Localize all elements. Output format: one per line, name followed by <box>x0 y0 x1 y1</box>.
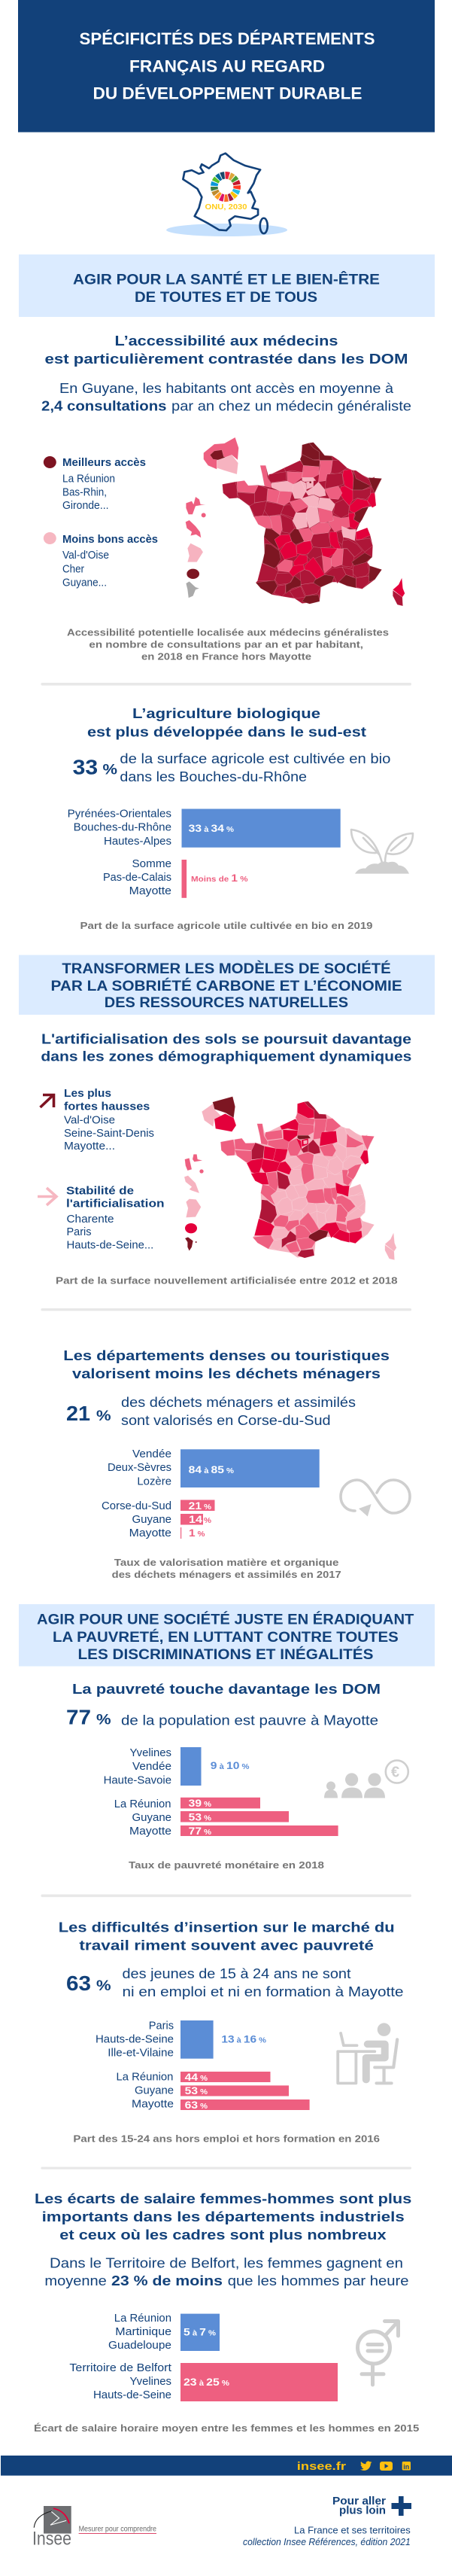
callout: pour aller plus loin <box>243 2495 411 2547</box>
map: accessibilité aux médecins par département <box>186 437 405 606</box>
section band: société juste: LA PAUVRETÉ, EN LUTTANT CONTRE TOUTES <box>53 1629 399 1646</box>
callout: pour aller plus loin: Pour aller <box>332 2495 386 2507</box>
caption: Accessibilité potentielle localisée aux médecins généralistes <box>67 628 389 638</box>
key figure: dans les Bouches-du-Rhône <box>120 769 307 784</box>
bar chart: Guyane <box>132 1514 171 1526</box>
bar chart: 39 % <box>189 1797 211 1809</box>
panel: accessibilité aux médecins <box>41 333 411 662</box>
key figure <box>66 1966 403 1999</box>
section band: modèles de société: TRANSFORMER LES MODÈLES DE SOCIÉTÉ <box>62 961 391 977</box>
callout: pour aller plus loin: La France et ses territoires <box>294 2525 411 2536</box>
caption: Part de la surface agricole utile cultivée en bio en 2019 <box>80 921 373 931</box>
key figure text <box>41 381 411 414</box>
logo: Insee: Insee <box>32 2528 71 2549</box>
caption: Part des 15-24 ans hors emploi et hors formation en 2016 <box>73 2133 380 2144</box>
legend: plus fortes hausses: Les plus <box>64 1088 111 1100</box>
bar chart: Pas-de-Calais <box>103 872 171 884</box>
bar chart: Yvelines <box>129 1747 171 1759</box>
icon: people and euro: € <box>391 1765 399 1781</box>
section band: modèles de société: DES RESSOURCES NATURELLES <box>105 995 348 1011</box>
caption: des déchets ménagers et assimilés en 2017 <box>112 1570 341 1580</box>
legend: moins bons accès: Val-d'Oise <box>62 550 109 562</box>
legend: stabilité de l'artificialisation: Charente <box>66 1213 114 1226</box>
bar chart: 44 % <box>185 2071 208 2083</box>
map: artificialisation par département <box>184 1097 396 1260</box>
heading: L'artificialisation des sols se poursuit davantage <box>41 1031 411 1046</box>
icon: gender equality <box>358 2322 399 2385</box>
heading: Les difficultés d’insertion sur le marché du <box>59 1920 395 1935</box>
key figure text: 2,4 consultations <box>41 399 167 414</box>
legend: stabilité de l'artificialisation: Stabilité de <box>66 1185 134 1197</box>
caption <box>112 1557 341 1580</box>
logo: Insee: Mesurer pour comprendre <box>79 2525 156 2534</box>
section band: modèles de société: PAR LA SOBRIÉTÉ CARBONE ET L’ÉCONOMIE <box>51 978 402 994</box>
bar chart <box>69 2313 338 2401</box>
icon: person at desk <box>338 2023 397 2083</box>
key figure: des jeunes de 15 à 24 ans ne sont <box>122 1966 350 1981</box>
heading: dans les zones démographiquement dynamiques <box>41 1049 411 1064</box>
caption: Part de la surface nouvellement artificialisée entre 2012 et 2018 <box>56 1275 398 1286</box>
panel: écarts de salaire <box>34 2191 419 2434</box>
heading: est particulièrement contrastée dans les DOM <box>45 352 408 367</box>
key figure: 63 <box>66 1972 91 1995</box>
icon: people and euro <box>324 1761 408 1798</box>
panel: agriculture biologique <box>68 706 413 931</box>
bar chart: Somme <box>132 858 171 870</box>
heading: La pauvreté touche davantage les DOM <box>72 1682 381 1697</box>
bar chart: Martinique <box>115 2326 171 2338</box>
bar chart: Bouches-du-Rhône <box>74 822 171 834</box>
bar chart: Vendée <box>132 1448 171 1460</box>
bar chart: 13 à 16 % <box>221 2033 266 2045</box>
heading: Les écarts de salaire femmes-hommes sont plus <box>35 2191 411 2206</box>
bar chart: Paris <box>149 2020 174 2032</box>
heading <box>41 1031 411 1064</box>
heading: est plus développée dans le sud-est <box>87 724 366 739</box>
section band: société juste: AGIR POUR UNE SOCIÉTÉ JUSTE EN ÉRADIQUANT <box>37 1611 414 1628</box>
key figure text: Dans le Territoire de Belfort, les femmes gagnent en <box>50 2255 403 2270</box>
bar chart: Haute-Savoie <box>104 1774 171 1786</box>
logo: Insee <box>32 2506 156 2549</box>
bar chart: 9 à 10 % <box>211 1759 250 1771</box>
bar chart: 23 à 25 % <box>184 2376 229 2388</box>
footer bar <box>1 2456 452 2476</box>
legend: meilleurs accès: Bas-Rhin, <box>62 486 107 498</box>
heading: L’accessibilité aux médecins <box>114 333 338 349</box>
key figure text: 23 % de moins <box>111 2273 223 2288</box>
key figure: 33 <box>73 756 98 778</box>
key figure: % <box>96 1713 111 1728</box>
heading: travail riment souvent avec pauvreté <box>79 1938 374 1953</box>
bar chart: 21 % <box>189 1500 211 1512</box>
heading: L’agriculture biologique <box>132 706 320 721</box>
section band: santé: DE TOUTES ET DE TOUS <box>135 290 317 306</box>
caption: Taux de valorisation matière et organique <box>114 1557 338 1568</box>
icon: France outline with SDG wheel: ONU, 2030 <box>205 202 247 212</box>
key figure: 77 <box>66 1706 91 1729</box>
icon: France outline with SDG wheel <box>166 154 287 236</box>
legend: moins bons accès <box>44 532 158 589</box>
bar chart: 77 % <box>189 1825 211 1837</box>
caption: Écart de salaire horaire moyen entre les femmes et les hommes en 2015 <box>34 2422 419 2434</box>
icon: plus <box>391 2496 411 2516</box>
caption: en nombre de consultations par an et par habitant, <box>89 640 363 650</box>
key figure text: que les hommes par heure <box>228 2273 409 2288</box>
caption: en 2018 en France hors Mayotte <box>141 652 311 662</box>
bar chart: 1 % <box>189 1527 205 1539</box>
bar chart <box>104 1747 338 1838</box>
bar chart: Territoire de Belfort <box>69 2362 171 2374</box>
legend: meilleurs accès <box>44 456 146 512</box>
bar chart: Mayotte <box>129 1825 171 1838</box>
legend: moins bons accès: Guyane... <box>62 577 107 589</box>
bar chart: 53 % <box>189 1810 211 1822</box>
callout: pour aller plus loin: plus loin <box>339 2504 386 2517</box>
panel: insertion sur le marché du travail <box>59 1920 404 2144</box>
legend: moins bons accès: Moins bons accès <box>62 534 158 546</box>
heading: importants dans les départements industriels <box>42 2209 405 2224</box>
panel: pauvreté <box>66 1682 408 1871</box>
legend: plus fortes hausses: Val-d'Oise <box>64 1115 115 1127</box>
icon: plant <box>351 830 413 874</box>
title: DU DÉVELOPPEMENT DURABLE <box>93 84 362 102</box>
bar chart: Lozère <box>137 1475 171 1487</box>
icon: linkedin <box>402 2462 411 2471</box>
title: SPÉCIFICITÉS DES DÉPARTEMENTS <box>80 29 375 48</box>
heading <box>87 706 366 739</box>
key figure <box>66 1395 356 1428</box>
legend: plus fortes hausses: fortes hausses <box>64 1101 150 1113</box>
icon: youtube <box>380 2462 393 2471</box>
section band: modèles de société <box>19 955 435 1015</box>
footer bar: insee.fr <box>297 2460 346 2473</box>
bar chart: 84 à 85 % <box>189 1463 234 1475</box>
legend: moins bons accès: Cher <box>62 564 84 576</box>
bar chart: 5 à 7 % <box>184 2326 216 2338</box>
panel: artificialisation des sols <box>38 1031 411 1286</box>
bar chart <box>102 1448 320 1539</box>
heading <box>45 333 408 367</box>
legend: stabilité de l'artificialisation: l'artificialisation <box>66 1198 164 1210</box>
bar chart: Moins de 1 % <box>191 872 248 884</box>
key figure text: moyenne <box>44 2273 107 2288</box>
legend: stabilité de l'artificialisation: Hauts-de-Seine... <box>66 1239 153 1251</box>
legend: plus fortes hausses: Mayotte... <box>64 1140 115 1153</box>
bar chart: Yvelines <box>129 2376 171 2388</box>
heading: et ceux où les cadres sont plus nombreux <box>59 2227 387 2243</box>
caption: Taux de pauvreté monétaire en 2018 <box>129 1860 324 1871</box>
bar chart: La Réunion <box>114 1798 171 1810</box>
key figure: ni en emploi et ni en formation à Mayotte <box>122 1984 403 1999</box>
icon: twitter <box>360 2461 372 2471</box>
title: FRANÇAIS AU REGARD <box>129 57 325 75</box>
key figure: 21 <box>66 1402 90 1425</box>
callout: pour aller plus loin: collection Insee Références, édition 2021 <box>243 2536 411 2547</box>
key figure text <box>44 2255 409 2288</box>
bar chart: Mayotte <box>132 2099 174 2111</box>
title <box>80 29 375 102</box>
legend: stabilité de l'artificialisation: Paris <box>66 1226 92 1238</box>
heading: Les départements denses ou touristiques <box>63 1348 390 1363</box>
bar chart: % <box>204 1517 211 1525</box>
bar chart: 53 % <box>185 2084 208 2096</box>
legend: meilleurs accès: Gironde... <box>62 500 108 512</box>
bar chart: Guadeloupe <box>108 2340 171 2352</box>
legend: plus fortes hausses <box>41 1088 154 1153</box>
bar chart: Mayotte <box>129 1527 171 1539</box>
key figure: % <box>96 1978 111 1994</box>
bar chart: Ille-et-Vilaine <box>108 2048 174 2060</box>
header banner <box>18 0 435 132</box>
legend: stabilité de l'artificialisation <box>38 1185 164 1251</box>
bar chart: 33 à 34 % <box>189 822 234 834</box>
bar chart: Mayotte <box>129 885 171 897</box>
caption <box>67 628 389 662</box>
key figure: sont valorisés en Corse-du-Sud <box>121 1413 331 1428</box>
key figure: des déchets ménagers et assimilés <box>121 1395 356 1410</box>
section band: société juste: LES DISCRIMINATIONS ET INÉGALITÉS <box>78 1646 373 1663</box>
legend: meilleurs accès: Meilleurs accès <box>62 457 146 469</box>
key figure: % <box>102 762 117 778</box>
bar chart: Corse-du-Sud <box>102 1500 171 1512</box>
bar chart: La Réunion <box>116 2072 173 2084</box>
bar chart: Guyane <box>135 2085 174 2097</box>
icon: dark arrow <box>41 1095 54 1107</box>
key figure text: par an chez un médecin généraliste <box>171 399 411 414</box>
panel: déchets ménagers <box>63 1348 410 1580</box>
legend: meilleurs accès: La Réunion <box>62 473 115 485</box>
heading <box>59 1920 395 1953</box>
bar chart: Vendée <box>132 1761 171 1773</box>
bar chart: Guyane <box>132 1812 171 1824</box>
bar chart: Deux-Sèvres <box>108 1462 171 1474</box>
section band: santé <box>19 254 435 317</box>
section band: santé: AGIR POUR LA SANTÉ ET LE BIEN-ÊTRE <box>73 271 380 288</box>
key figure <box>66 1706 378 1729</box>
bar chart: Hauts-de-Seine <box>96 2034 174 2046</box>
key figure: de la surface agricole est cultivée en bio <box>120 751 390 766</box>
key figure text: En Guyane, les habitants ont accès en moyenne à <box>59 381 394 396</box>
bar chart: 63 % <box>185 2099 208 2111</box>
bar chart <box>68 808 341 898</box>
key figure <box>73 751 390 784</box>
key figure: % <box>96 1408 111 1424</box>
bar chart: La Réunion <box>114 2313 171 2325</box>
bar chart: Hauts-de-Seine <box>93 2389 171 2401</box>
key figure: de la population est pauvre à Mayotte <box>121 1713 378 1728</box>
icon: linkedin: in <box>403 2463 409 2471</box>
heading <box>63 1348 390 1381</box>
bar chart: Pyrénées-Orientales <box>68 808 171 821</box>
icon: infinity recycling loop <box>341 1480 410 1516</box>
bar chart: 14 <box>189 1513 202 1525</box>
legend: plus fortes hausses: Seine-Saint-Denis <box>64 1128 154 1140</box>
bar chart: Hautes-Alpes <box>104 836 171 848</box>
icon: pink arrow <box>38 1188 56 1205</box>
section band: société juste <box>19 1604 435 1667</box>
heading <box>35 2191 411 2243</box>
heading: valorisent moins les déchets ménagers <box>72 1366 381 1381</box>
bar chart <box>96 2020 310 2111</box>
